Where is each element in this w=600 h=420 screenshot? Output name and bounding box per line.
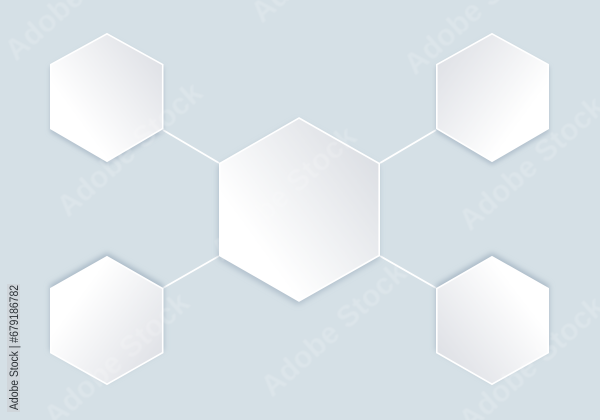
hexagon: top left — [51, 34, 163, 161]
watermark text: Adobe Stock — [255, 256, 413, 403]
hexagon: bottom left — [51, 257, 163, 384]
hexagon: bottom right — [437, 257, 548, 384]
hexagon: top right — [437, 34, 548, 161]
watermark text: Adobe Stock — [51, 76, 209, 223]
side credit label: Adobe Stock | #679186782 — [9, 285, 21, 410]
watermark text: Adobe Stock — [205, 120, 363, 267]
connector lines — [163, 130, 436, 288]
hexagon: center — [220, 118, 379, 301]
